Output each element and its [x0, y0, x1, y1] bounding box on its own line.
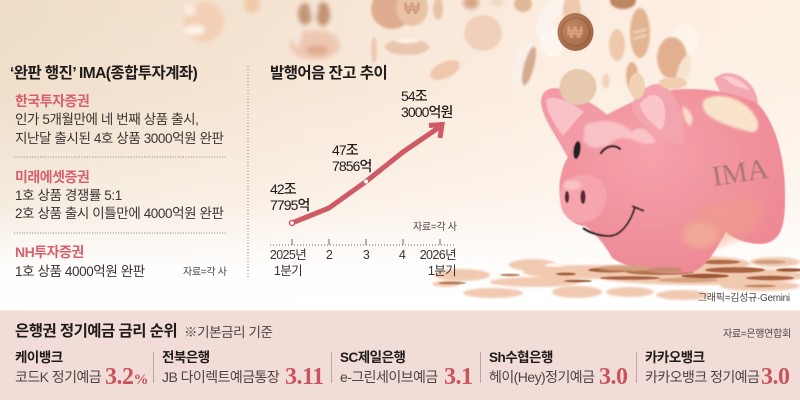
axis label: 2: 2 [326, 248, 332, 262]
axis label: 2025 Q1: 2025년 [270, 248, 306, 262]
falling coins [184, 0, 699, 90]
bank 4: 헤이(Hey)정기예금 [489, 369, 594, 385]
bank 1: 코드K 정기예금 [15, 369, 101, 385]
coins at the pig slot [629, 73, 687, 99]
axis label: 4: 4 [399, 248, 405, 262]
company: Korea Investment: 한국투자증권 [15, 93, 89, 109]
text: Korea Investment details line 2: 지난달 출시된 4호 상품 3000억원 완판 [15, 131, 224, 146]
value label: 2026 Q1: 54조 [401, 88, 427, 104]
bank 4: 3.0 [599, 364, 628, 390]
text: Mirae details line 2: 2호 상품 출시 이틀만에 4000억원 완판 [15, 206, 224, 221]
bank 2 [162, 350, 324, 390]
pig IMA lettering: IMA [710, 153, 771, 193]
bank 4 [489, 350, 628, 390]
coin on pig ear [560, 69, 596, 105]
value label: Q3 [332, 142, 372, 174]
bank 2: JB 다이렉트예금통장 [162, 369, 279, 385]
icon: won sign coins [404, 0, 584, 42]
illustration credit: 그래픽=김성규·Gemini [698, 293, 790, 304]
value label: 2026 Q1: 3000억원 [401, 104, 453, 120]
bank 3: 3.1 [444, 364, 472, 390]
line chart: issued note balance arrow [290, 124, 442, 226]
pig left ear [541, 88, 612, 165]
panel: deposit rate ranking [15, 322, 791, 390]
floor coins [432, 256, 800, 300]
pig body [559, 89, 785, 273]
bottom panel background [0, 310, 800, 400]
source note: 자료=각 사 [183, 267, 227, 278]
pig wink [601, 146, 620, 153]
bank 5: 카카오뱅크 정기예금 [645, 369, 759, 385]
bank 5: 3.0 [761, 364, 790, 390]
axis label: 2026 Q1 [420, 248, 456, 278]
bank 3: e-그린세이브예금 [340, 369, 438, 385]
heading: IMA: ‘완판 행진’ IMA(종합투자계좌) [10, 65, 197, 82]
bank 1: 3.2% [105, 364, 148, 390]
icon: won sign coins: ₩ [567, 23, 584, 42]
chart source note: 자료=각 사 [413, 222, 457, 233]
pig reflections [583, 96, 758, 148]
chart frame dividers [247, 66, 249, 277]
axis label: 3: 3 [363, 248, 369, 262]
pig smile [583, 206, 644, 236]
bank 1: 케이뱅크 [15, 350, 63, 365]
text: Mirae details: 1호 상품 경쟁률 5:1 [15, 188, 122, 203]
text: Korea Investment details: 인가 5개월만에 네 번째 상품 출시, [15, 112, 198, 127]
pig snout [560, 175, 607, 222]
value label: Q3: 47조 [332, 142, 358, 158]
company: NH: NH투자증권 [15, 244, 84, 260]
bank 1 [15, 350, 148, 390]
bank 5: 카카오뱅크 [645, 350, 705, 365]
value label: Q3: 7856억 [332, 158, 372, 174]
axis label: 2026 Q1: 2026년 [420, 248, 456, 262]
bank 2: 3.11 [285, 364, 324, 390]
bank 5 [645, 350, 790, 390]
pig left eye [572, 141, 582, 159]
pig nostrils [565, 190, 586, 204]
value label: 2026 Q1 [401, 88, 453, 120]
company: Mirae Asset: 미래에셋증권 [15, 169, 89, 185]
bank 2: 전북은행 [162, 350, 210, 365]
pig far ear [714, 73, 758, 103]
axis label: 2025 Q1: 1분기 [274, 264, 302, 278]
axis label: 2025 Q1 [270, 248, 306, 278]
axis label: 2026 Q1: 1분기 [428, 264, 456, 278]
text: NH details: 1호 상품 4000억원 완판 [15, 264, 145, 279]
value label: 2025 Q1: 7795억 [270, 197, 310, 213]
pig right ear [632, 84, 684, 143]
panel heading: 은행권 정기예금 금리 순위 [15, 323, 177, 340]
value label: 2025 Q1: 42조 [270, 181, 296, 197]
icon: piggy bank [541, 69, 785, 273]
panel source: 자료=은행연합회 [723, 329, 791, 340]
bank 4: Sh수협은행 [489, 350, 553, 365]
chart title: 발행어음 잔고 추이 [270, 65, 387, 82]
value label: 2025 Q1 [270, 181, 310, 213]
panel note: ※기본금리 기준 [184, 325, 273, 340]
bank 3 [340, 350, 472, 390]
bank 3: SC제일은행 [340, 350, 405, 365]
